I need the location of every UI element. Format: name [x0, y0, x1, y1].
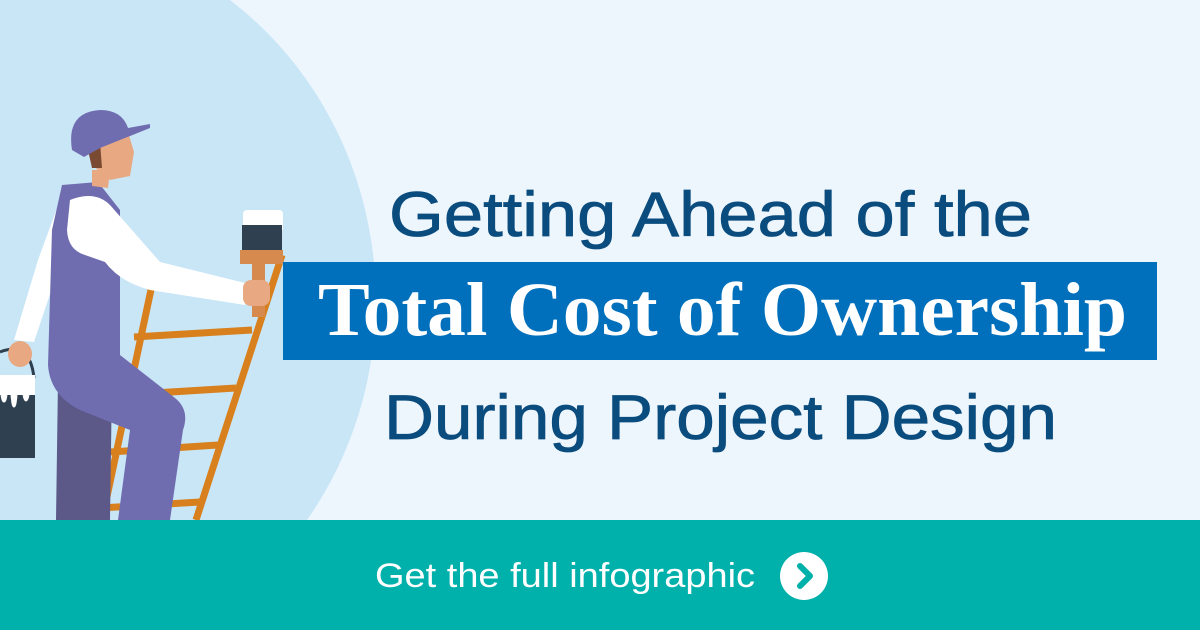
ladder — [100, 255, 282, 520]
back leg — [56, 380, 112, 520]
icon: arrow circle — [780, 552, 828, 600]
front arm (white sleeve) — [67, 196, 245, 305]
title line 1: Getting Ahead of the — [389, 180, 1032, 250]
paint bucket — [0, 349, 35, 458]
illustration: painter on ladder — [0, 110, 286, 520]
back arm and hand — [8, 200, 60, 367]
overalls body and front leg — [48, 182, 185, 520]
head — [71, 110, 150, 188]
bottom call-to-action band — [0, 520, 1200, 630]
title line 2: Total Cost of Ownership — [318, 268, 1127, 352]
paint brush — [240, 210, 283, 317]
cta text: Get the full infographic — [375, 557, 755, 595]
front hand — [243, 280, 270, 306]
title band — [283, 262, 1157, 360]
title line 3: During Project Design — [384, 383, 1057, 453]
